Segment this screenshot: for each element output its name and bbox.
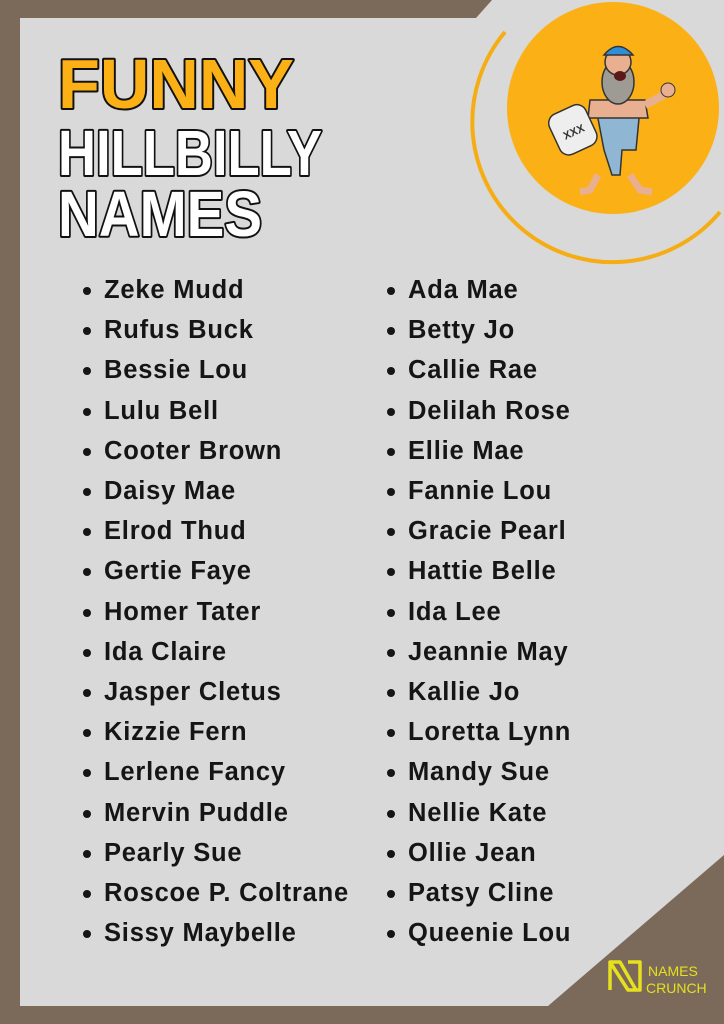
list: left column: Lerlene Fancy (104, 758, 286, 786)
logo: names crunch: CRUNCH (646, 980, 707, 996)
list: right column: Gracie Pearl (408, 517, 566, 545)
list: left column: Lulu Bell (104, 397, 219, 425)
icon: hillbilly figure (545, 46, 675, 192)
list: left column: Kizzie Fern (104, 718, 247, 746)
list: right column: Callie Rae (408, 356, 538, 384)
list: right column: Queenie Lou (408, 919, 571, 947)
list: right column: Nellie Kate (408, 799, 547, 827)
list: left column: Jasper Cletus (104, 678, 282, 706)
list: right column: Hattie Belle (408, 557, 556, 585)
list: left column: Pearly Sue (104, 839, 242, 867)
list: right column: Betty Jo (408, 316, 515, 344)
list: left column: Daisy Mae (104, 477, 236, 505)
list: right column: Ida Lee (408, 598, 501, 626)
list: left column: Sissy Maybelle (104, 919, 297, 947)
list: left column: Cooter Brown (104, 437, 282, 465)
list: right column: Fannie Lou (408, 477, 552, 505)
list: left column: Elrod Thud (104, 517, 247, 545)
list: right column: Delilah Rose (408, 397, 571, 425)
list: left column: Rufus Buck (104, 316, 254, 344)
list: left column: Zeke Mudd (104, 276, 244, 304)
title: FUNNY (58, 45, 294, 123)
logo: names crunch: NAMES (648, 963, 698, 979)
list: left column: Homer Tater (104, 598, 261, 626)
list: right column: Ellie Mae (408, 437, 524, 465)
list: right column: Kallie Jo (408, 678, 520, 706)
title: HILLBILLY (58, 117, 322, 189)
list: right column: Mandy Sue (408, 758, 550, 786)
list: left column: Mervin Puddle (104, 799, 289, 827)
icon: hillbilly figure: XXX (562, 122, 587, 143)
list: right column: Ada Mae (408, 276, 518, 304)
list: right column: Loretta Lynn (408, 718, 571, 746)
ring arc (472, 32, 720, 262)
list: left column: Bessie Lou (104, 356, 248, 384)
list: left column: Roscoe P. Coltrane (104, 879, 349, 907)
list: left column: Ida Claire (104, 638, 227, 666)
list: right column: Jeannie May (408, 638, 568, 666)
list: right column: Patsy Cline (408, 879, 554, 907)
list: right column: Ollie Jean (408, 839, 536, 867)
list: left column (83, 276, 349, 947)
orange circle with hillbilly (507, 2, 719, 214)
title: NAMES (58, 178, 262, 250)
list: left column: Gertie Faye (104, 557, 252, 585)
list: right column (387, 276, 571, 947)
logo: names crunch (610, 962, 707, 996)
title (58, 45, 322, 250)
